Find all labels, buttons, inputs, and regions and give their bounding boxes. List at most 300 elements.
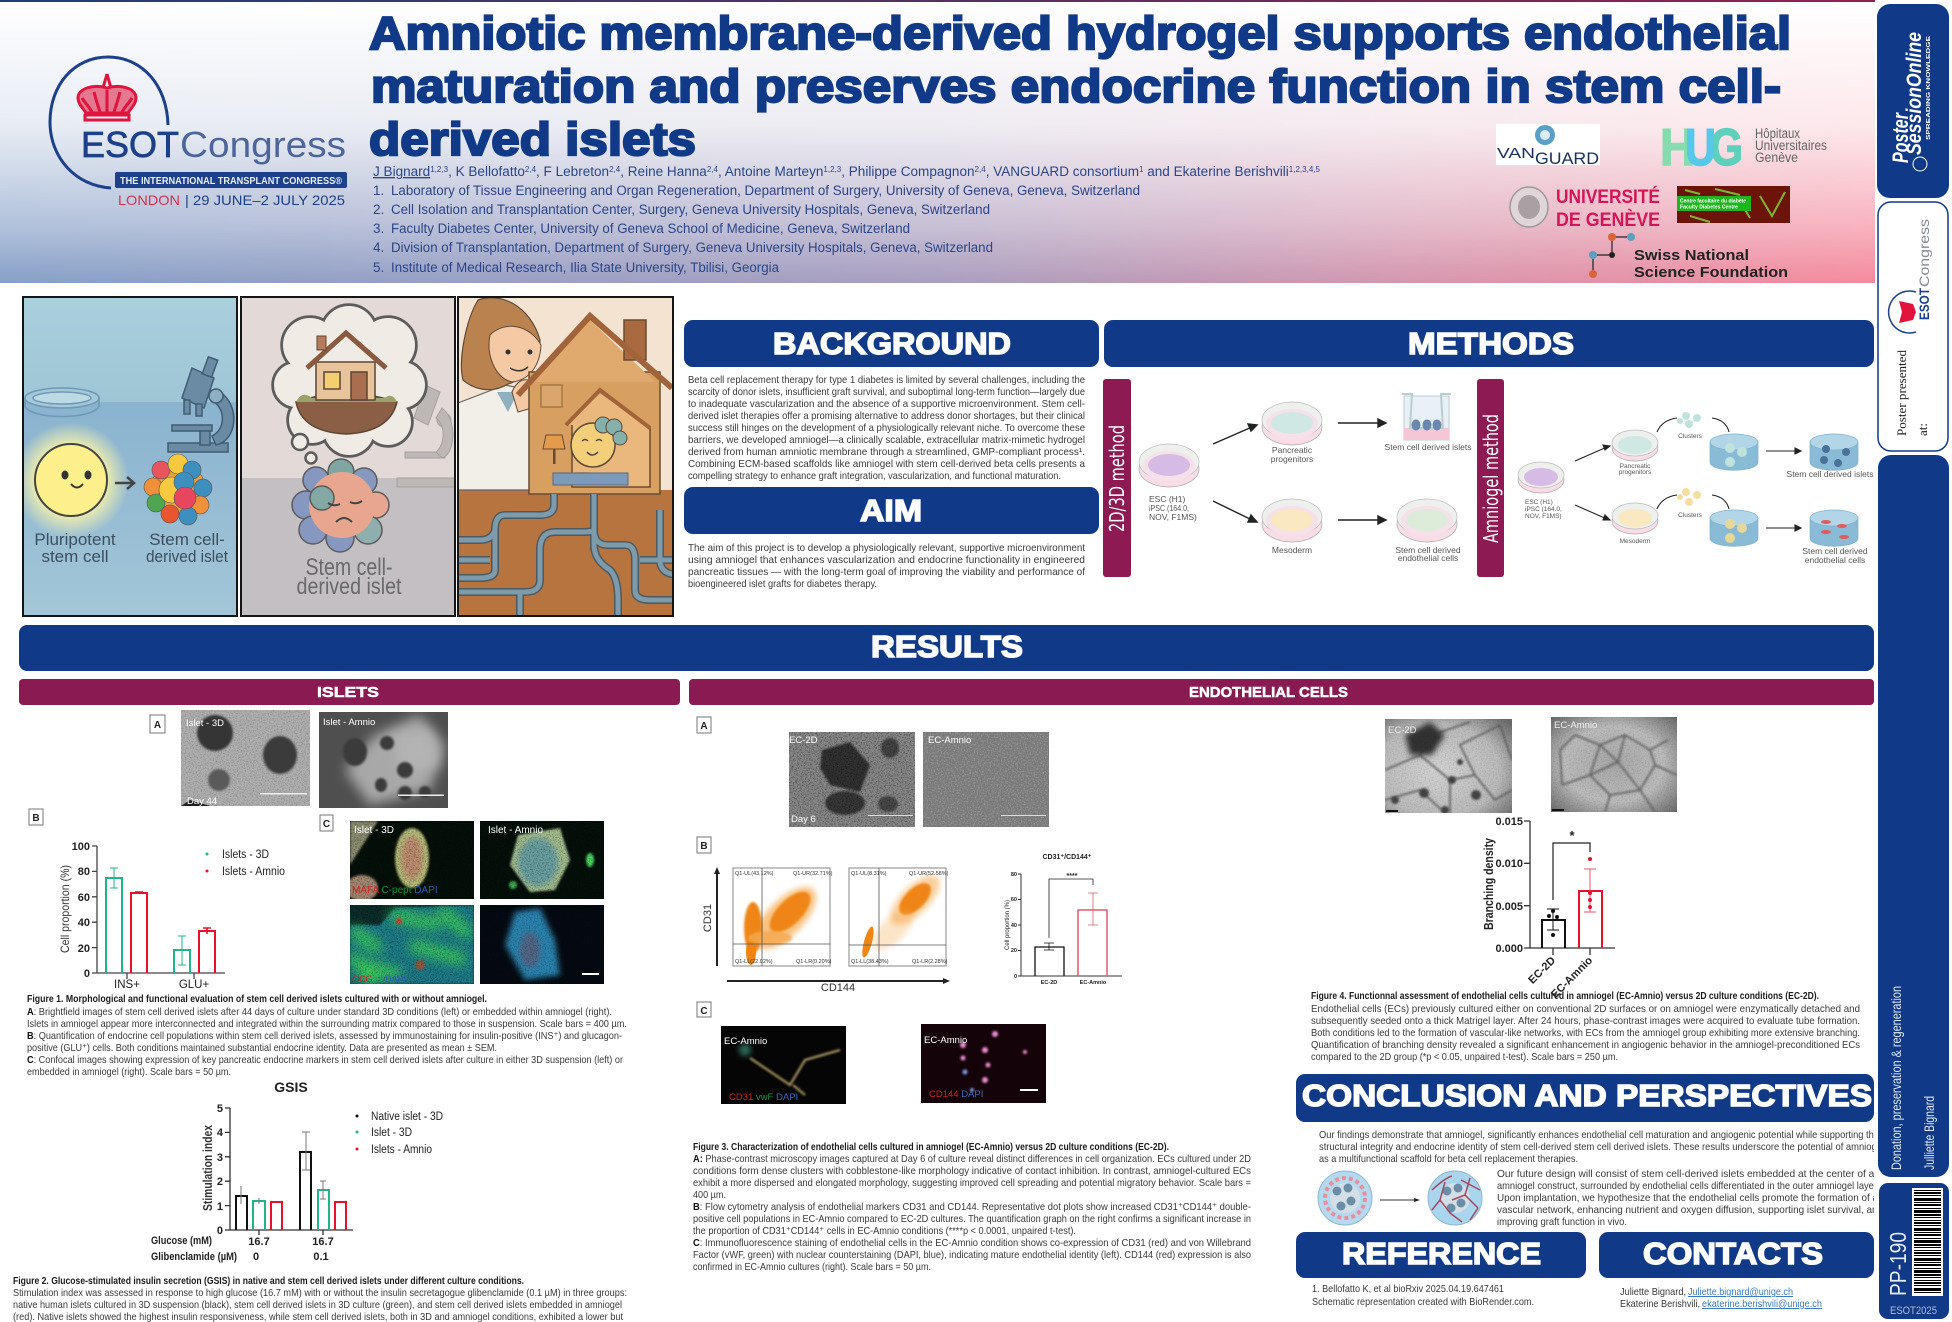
affiliations: 1. <box>373 183 384 198</box>
label: stem cell derived islets: Stem cell derived islets <box>1787 469 1873 479</box>
title: derived islets <box>369 113 696 165</box>
caption: figure 4: subsequently seeded onto a thick Matrigel layer. After 24 hours, phase-contrast images were acquired to evaluate tube formation. <box>1311 1016 1860 1027</box>
image: EC-2D phase contrast: EC-2D <box>789 735 818 746</box>
legend: Islets - Amnio <box>222 866 285 878</box>
affiliations: Division of Transplantation, Department of Surgery, Geneva University Hospitals, Geneva, Switzerland <box>391 240 993 255</box>
caption: figure 3: 400 µm. <box>693 1190 726 1201</box>
image: confocal islet 3D bottom: GCG ... DAPI <box>352 974 406 984</box>
caption: figure 3: confirmed in EC-Amnio cultures (right). Scale bars = 50 µm. <box>693 1262 931 1273</box>
labels: clusters: Clusters <box>1678 512 1703 519</box>
title: Amniotic membrane-derived hydrogel supports endothelial <box>369 7 1791 59</box>
label: pancreatic progenitors: Pancreatic <box>1620 463 1651 470</box>
logo: HUG: G <box>1710 119 1743 177</box>
text block: aim: The aim of this project is to develop a physiologically relevant, supportive microenvironment <box>688 543 1085 554</box>
text block: perspectives: Upon implantation, we hypothesize that the endothelial cells promote the formation of a <box>1497 1193 1878 1204</box>
affiliations: 3. <box>373 221 384 236</box>
chart: branching density: EC-Amnio <box>1549 954 1595 1001</box>
label: ESC / iPSC: iPSC (164.0, <box>1525 506 1562 513</box>
text block: background: Combining ECM-based scaffolds like amniogel with stem cell-derived beta cells presents a <box>688 459 1085 470</box>
caption: figure 2: Stimulation index was assessed in response to high glucose (16.7 mM) with or without the insulin secretagogue glibenclamide (0.1 µM) in three groups: <box>13 1288 627 1299</box>
title <box>369 7 1791 165</box>
panel: presented at: Congress <box>1916 219 1932 287</box>
text block: background: scarcity of donor islets, insufficient graft survival, and suboptimal long-term function—largely due <box>688 387 1085 398</box>
caption: figure 1: positive (GLU⁺) cells. Both conditions maintained substantial endocrine identity. Data are presented as mean ± SEM. <box>27 1043 497 1054</box>
logo: ESOT Congress: Congress <box>180 124 346 165</box>
chart: GSIS: GSIS <box>274 1079 308 1095</box>
heading: results <box>19 625 1874 671</box>
panel: topic and author: Julliette Bignard <box>1921 1096 1937 1170</box>
affiliations: 2. <box>373 202 384 217</box>
caption: figure 1: A: Brightfield images of stem cell derived islets after 44 days of culture under standard 3D conditions (left) or embedded within amniogel (right). <box>27 1007 612 1018</box>
icon: microscope <box>168 357 234 452</box>
legend: Native islet - 3D <box>371 1111 443 1123</box>
chart: branching density: 0.005 <box>1495 901 1523 913</box>
chart: CD31+/CD144+ proportion: 40 <box>1011 923 1017 929</box>
icon: arrow <box>115 477 134 489</box>
icon: house with happy cell <box>518 316 672 494</box>
authors: , F Lebreton <box>536 164 609 179</box>
axis table: 16.7 <box>312 1236 334 1248</box>
label: stem cell derived islets: Stem cell derived islets <box>1385 442 1471 452</box>
labels: clusters: Clusters <box>1678 433 1703 440</box>
caption: figure 1: C: Confocal images showing expression of key pancreatic endocrine markers in stem cell derived islets after culture in either 3D suspension (left) or <box>27 1055 624 1066</box>
chart: cell proportion: 80 <box>78 866 90 878</box>
caption: figure 4: Both conditions led to the formation of vascular-like networks, with ECs from the amniogel group exhibiting more extensive branching. <box>1311 1028 1860 1039</box>
chart: CD31+/CD144+ proportion: EC-2D <box>1041 980 1057 986</box>
authors: , K Bellofatto <box>448 164 525 179</box>
icon: crown <box>78 74 136 120</box>
labels: clusters <box>1678 433 1703 519</box>
icon: starting dish <box>1139 444 1199 487</box>
icon: endothelial dish <box>1397 499 1457 542</box>
text block: contacts: Juliette.bignard@unige.ch <box>1688 1287 1793 1298</box>
authors: J Bignard <box>373 164 430 179</box>
image: islet 3D brightfield: Islet - 3D <box>186 718 224 729</box>
logo: VANGUARD: GUARD <box>1535 149 1599 168</box>
label: ESC / iPSC: NOV, F1MS) <box>1149 512 1197 522</box>
logo: Universite de Geneve: DE GENÈVE <box>1556 208 1660 231</box>
label: stem cell derived endothelial cells <box>1395 545 1461 563</box>
panel label: figure 1 C: C <box>323 819 330 830</box>
label: ESC / iPSC: iPSC (164.0, <box>1149 503 1189 513</box>
image: confocal islet 3D top <box>346 821 474 901</box>
image: confocal islet 3D bottom <box>350 905 474 985</box>
caption: figure 3: Factor (vWF, green) with nuclear counterstaining (DAPI, blue), indicating mature endothelial identity (left). CD144 (red) expression is also <box>693 1250 1251 1261</box>
icon: transwell with islets <box>1402 394 1451 440</box>
icon: pancreatic progenitors dish <box>1262 402 1322 445</box>
image: EC-Amnio CD144: CD144 DAPI <box>929 1089 983 1100</box>
logo: Faculty Diabetes Centre <box>1677 186 1790 223</box>
label: pluripotent stem cell <box>36 533 116 562</box>
text block: perspectives: improving graft function in vivo. <box>1497 1217 1627 1228</box>
heading: islets: ISLETS <box>317 684 379 701</box>
caption: figure 4 <box>1311 990 1860 1063</box>
logo: ESOT Congress: | 29 JUNE–2 JULY 2025 <box>185 192 345 208</box>
icon: clusters pancreatic <box>1677 412 1701 428</box>
axis table: Glucose (mM) <box>151 1235 212 1247</box>
panel: presented at: at: <box>1915 423 1930 436</box>
label bar: amniogel method: Amniogel method <box>1479 414 1503 543</box>
chart: GSIS: Stimulation index <box>201 1125 215 1211</box>
panel: topic and author: Donation, preservation & regeneration <box>1888 986 1904 1170</box>
chart: GSIS: 4 <box>217 1127 224 1139</box>
caption: figure 1: Figure 1. Morphological and functional evaluation of stem cell derived islets cultured with or without amniogel. <box>27 993 487 1005</box>
panel: PosterSessionOnline: Poster <box>1888 112 1913 163</box>
chart: cell proportion: 60 <box>78 892 90 904</box>
chart: branching density: * <box>1569 828 1575 843</box>
text block: aim: pancreatic tissues — with the long-term goal of improving the viability and performance of <box>688 567 1085 578</box>
flow plot: EC-2D: Q1-LR(0.20%) <box>796 959 832 965</box>
icon: scientist <box>458 298 541 490</box>
caption: figure 3: A: Phase-contrast microscopy images captured at Day 6 of culture reveal distinct differences in cell organization. ECs cultured under 2D <box>693 1154 1251 1165</box>
chart: GSIS: 5 <box>217 1103 223 1115</box>
image: EC-2D tube formation: EC-2D <box>1388 725 1417 736</box>
label: mesoderm: Mesoderm <box>1620 538 1650 545</box>
image: confocal islet amnio top: Islet - Amnio <box>488 825 543 836</box>
chart: GSIS: 0 <box>217 1225 223 1237</box>
caption: figure 4: Endothelial cells (ECs) previously cultured either on conventional 2D surfaces or on amniogel were enzymatically detached and <box>1311 1004 1860 1015</box>
label: ESC / iPSC: ESC (H1) <box>1525 499 1553 506</box>
text block: reference <box>1312 1284 1534 1308</box>
chart: cell proportion: 100 <box>72 841 90 853</box>
image: confocal islet 3D top: MAFA C-pept DAPI <box>352 885 438 896</box>
label: pluripotent stem cell: stem cell <box>41 547 109 566</box>
legend: Islets - 3D <box>222 849 269 861</box>
label: pancreatic progenitors: progenitors <box>1619 469 1652 476</box>
heading: reference: REFERENCE <box>1342 1236 1541 1271</box>
image: confocal islet 3D top: Islet - 3D <box>354 825 394 836</box>
caption: figure 3: B: Flow cytometry analysis of endothelial markers CD31 and CD144. Representative dot plots show increased CD31⁺CD144⁺ double- <box>693 1202 1251 1213</box>
logo: HUG: U <box>1685 119 1716 177</box>
chart: CD31+/CD144+ proportion: 0 <box>1014 974 1017 980</box>
image: islet 3D brightfield <box>181 710 310 807</box>
chart: cell proportion <box>58 841 285 991</box>
text block: background: compelling strategy to enhance graft integration, vascularization, and functional maturation. <box>688 471 1061 482</box>
arrows <box>1213 419 1386 524</box>
heading: endothelial cells: ENDOTHELIAL CELLS <box>1189 684 1348 701</box>
logo: Swiss National Science Foundation: Science Foundation <box>1634 264 1788 281</box>
chart: CD31+/CD144+ proportion: EC-Amnio <box>1080 980 1107 986</box>
flow plot: EC-Amnio: Q1-UL(8.31%) <box>851 871 887 877</box>
text block: aim: bioengineered islet grafts for diabetes therapy. <box>688 579 877 590</box>
axes <box>702 867 950 994</box>
logo: Universite de Geneve <box>1510 185 1660 231</box>
caption: figure 3: exhibit a more dispersed and elongated morphology, suggesting improved cell spreading and potential migratory behavior. Scale bars = <box>693 1178 1251 1189</box>
flow plot: EC-Amnio: Q1-LR(2.28%) <box>912 959 948 965</box>
heading: contacts <box>1599 1232 1874 1278</box>
text block: conclusion: structural integrity and endocrine identity of stem cell-derived stem cell derived islets. These results underscore the potential of amniogel <box>1319 1142 1884 1153</box>
image: EC-Amnio CD144 <box>921 1024 1046 1103</box>
chart: cell proportion: 20 <box>78 943 90 955</box>
heading: results: RESULTS <box>871 629 1023 664</box>
label: stem cell derived islet <box>146 533 228 562</box>
logo: HUG: Genève <box>1755 150 1798 165</box>
arrow <box>1380 1198 1420 1202</box>
logo: Faculty Diabetes Centre: Centre facultaire du diabète <box>1680 198 1746 204</box>
affiliations: 5. <box>373 260 384 275</box>
image: EC-Amnio tube formation <box>1551 717 1677 812</box>
authors: and Ekaterine Berishvili <box>1143 164 1289 179</box>
chart: CD31+/CD144+ proportion: 60 <box>1011 897 1017 903</box>
caption: figure 3: Figure 3. Characterization of endothelial cells cultured in amniogel (EC-Amnio) versus 2D culture conditions (EC-2D). <box>693 1141 1169 1153</box>
logo: HUG: Universitaires <box>1755 138 1827 153</box>
caption: figure 3 <box>693 1141 1251 1273</box>
chart: flow cytometry plots <box>702 867 950 994</box>
authors: , Reine Hanna <box>620 164 707 179</box>
chart: branching density: 0.015 <box>1495 816 1523 828</box>
panel label: figure 3 A: A <box>700 721 708 732</box>
chart: cell proportion: GLU+ <box>179 979 209 991</box>
axis table: 0 <box>253 1251 259 1263</box>
axis table: 0.1 <box>313 1251 329 1263</box>
bars <box>1542 920 1565 948</box>
image: confocal islet amnio bottom <box>480 905 604 984</box>
heading: contacts: CONTACTS <box>1643 1236 1823 1271</box>
panel: illustration pluripotent stem cell <box>13 297 237 616</box>
chart: CD31+/CD144+ proportion: 80 <box>1011 872 1017 878</box>
chart: CD31+/CD144+ proportion: 20 <box>1011 948 1017 954</box>
logo: Faculty Diabetes Centre: Faculty Diabetes Centre <box>1680 204 1738 210</box>
panel label: figure 3 C: C <box>700 1006 708 1017</box>
chart: cell proportion: 40 <box>78 917 90 929</box>
authors: 1 <box>1139 165 1144 174</box>
icon: colorful islet <box>144 454 212 525</box>
logo: Universite de Geneve: UNIVERSITÉ <box>1556 185 1660 208</box>
heading: background: BACKGROUND <box>773 326 1011 361</box>
arrows <box>1575 418 1801 531</box>
panel: 2D/3D method diagram <box>1103 379 1471 577</box>
logo: ESOT Congress: THE INTERNATIONAL TRANSPLANT CONGRESS® <box>120 175 342 187</box>
label: stem cell derived endothelial cells: Stem cell derived <box>1395 545 1461 555</box>
caption: figure 4: Figure 4. Functionnal assessment of endothelial cells cultured in amniogel (EC-Amnio) versus 2D culture conditions (EC-2D). <box>1311 990 1819 1002</box>
logo: VANGUARD <box>1496 124 1600 168</box>
authors: 2,4 <box>525 165 537 174</box>
label: stem cell derived islet <box>297 558 402 594</box>
panel: illustration scientist and vascularized house <box>458 297 680 616</box>
axis table <box>151 1235 334 1263</box>
panel: PosterSessionOnline: SPREADING KNOWLEDGE <box>1926 35 1932 140</box>
text block: aim: using amniogel that enhances vascularization and endocrine functionality in engineered <box>688 555 1085 566</box>
chart: cell proportion: 0 <box>84 968 90 980</box>
panel: presented at <box>1878 202 1948 451</box>
header banner <box>0 0 1875 283</box>
label: ESC / iPSC: NOV, F1MS) <box>1525 513 1562 520</box>
caption: figure 2: Figure 2. Glucose-stimulated insulin secretion (GSIS) in native and stem cell derived islets under different culture conditions. <box>13 1275 524 1287</box>
title: maturation and preserves endocrine function in stem cell- <box>371 60 1781 112</box>
panel label: figure 1 A: A <box>154 720 161 731</box>
authors: 1,2,3 <box>823 165 842 174</box>
label bar: amniogel method <box>1477 379 1504 577</box>
bars <box>106 868 215 973</box>
caption: figure 1: Islets in amniogel appear more interconnected and integrated within the surrounding matrix compared to those in suspension. Scale bars = 400 µm. <box>27 1019 627 1030</box>
text block: conclusion <box>1319 1130 1884 1165</box>
bars <box>236 1132 346 1230</box>
authors: , VANGUARD consortium <box>986 164 1139 179</box>
flow plot: EC-Amnio: Q1-UR(52.58%) <box>909 871 949 877</box>
label: stem cell derived islet: Stem cell- <box>149 530 225 549</box>
logo: VANGUARD: VAN <box>1497 145 1535 162</box>
text block: background: to inadequate vascularization and the absence of a supportive microenvironment. Stem cell- <box>688 399 1085 410</box>
icon: vascular pipes <box>458 494 680 616</box>
caption: figure 4: compared to the 2D group (*p < 0.05, unpaired t-test). Scale bars = 250 µm. <box>1311 1052 1618 1063</box>
chart: CD31+/CD144+ proportion: Cell proportion (%) <box>1005 900 1011 950</box>
label: stem cell derived islet: derived islet <box>296 573 402 599</box>
affiliations: 4. <box>373 240 384 255</box>
legend: Islets - Amnio <box>371 1144 432 1156</box>
heading: methods <box>1104 320 1874 367</box>
panel label: figure 3 B <box>697 837 711 853</box>
image: EC-Amnio phase contrast <box>923 732 1049 827</box>
flow plot: EC-2D: Q1-UR(32.71%) <box>793 871 833 877</box>
panel label: figure 1 A <box>150 715 165 733</box>
image: confocal islet amnio top <box>480 821 604 899</box>
flow plot: EC-2D <box>733 868 833 966</box>
panel label: figure 3 B: B <box>700 841 708 852</box>
image: EC-Amnio tube formation: EC-Amnio <box>1554 720 1597 731</box>
label: stem cell derived islet: derived islet <box>146 547 228 566</box>
label: pancreatic progenitors: progenitors <box>1271 454 1313 464</box>
icon: mesoderm dish <box>1612 503 1658 534</box>
logo: ESOT Congress: ESOT <box>81 124 179 165</box>
heading: aim: AIM <box>860 493 922 528</box>
text block: perspectives: amniogel construct, surrounded by endothelial cells differentiated in the outer amniogel layer. <box>1497 1181 1879 1192</box>
text block: perspectives: Our future design will consist of stem cell-derived islets embedded at the center of an <box>1497 1169 1880 1180</box>
label: stem cell derived islet: Stem cell- <box>306 554 392 581</box>
text block: contacts: ekaterine.berishvili@unige.ch <box>1702 1299 1822 1310</box>
heading: islets <box>19 679 680 705</box>
image: EC-2D phase contrast: Day 6 <box>791 814 816 825</box>
axis table: Glibenclamide (µM) <box>151 1251 237 1263</box>
text block: background <box>688 375 1085 482</box>
chart: cell proportion: INS+ <box>114 979 140 991</box>
affiliations: Institute of Medical Research, Ilia State University, Tbilisi, Georgia <box>391 260 779 275</box>
panel: illustration islet dreaming of a niche <box>241 297 457 616</box>
heading: background <box>684 320 1099 367</box>
caption: figure 2: native human islets cultured in 3D suspension (black), stem cell derived islets in 3D culture (green), and stem cell derived islets embedded in amniogel <box>13 1300 622 1311</box>
logo: HUG: Hôpitaux <box>1755 126 1800 141</box>
label: pancreatic progenitors: Pancreatic <box>1272 445 1313 455</box>
chart: GSIS: 1 <box>217 1201 223 1213</box>
icon: clusters mesoderm <box>1677 488 1701 506</box>
chart: CD31+/CD144+ proportion: **** <box>1067 873 1078 880</box>
panel: presented at: ESOT <box>1916 288 1932 320</box>
text block: background: derived islet therapies offer a promising alternative to address donor shortages, but their clinical <box>688 411 1085 422</box>
flow plot: EC-Amnio: Q1-LL(38.43%) <box>851 959 889 965</box>
text block: perspectives: vascular network, enhancing nutrient and oxygen diffusion, supporting islet survival, and <box>1497 1205 1883 1216</box>
text block: conclusion: as a multifunctional scaffold for beta cell replacement therapies. <box>1319 1154 1578 1165</box>
chart: cell proportion: Cell proportion (%) <box>58 865 72 953</box>
icon: starting dish <box>1518 462 1564 493</box>
panel label: figure 3 A <box>697 717 711 733</box>
icon: faded microscope <box>397 385 457 487</box>
text block: background: Beta cell replacement therapy for type 1 diabetes is limited by several challenges, including the <box>688 375 1085 386</box>
flow plot: EC-2D: Q1-LL(22.02%) <box>735 959 773 965</box>
text block: background: barriers, we developed amniogel—a clinically scalable, extracellular matrix-mimetic hydrogel <box>688 435 1085 446</box>
label: pancreatic progenitors <box>1271 445 1313 464</box>
image: EC-Amnio CD31 vWF: CD31 vwF DAPI <box>729 1092 798 1103</box>
image: EC-Amnio CD144: EC-Amnio <box>924 1035 967 1046</box>
image: EC-Amnio CD31 vWF <box>721 1026 846 1104</box>
icon: pancreatic progenitors dish <box>1612 430 1658 461</box>
image: islet amnio brightfield <box>319 712 448 808</box>
authors: 1,2,3 <box>430 165 449 174</box>
icon: happy stem cell <box>24 424 127 536</box>
affiliations: Faculty Diabetes Center, University of Geneva School of Medicine, Geneva, Switzerland <box>391 221 910 236</box>
icon: sad islet <box>292 459 389 552</box>
caption: figure 3: conditions form dense clusters with cobblestone-like morphology indicative of contact inhibition. In contrast, amniogel-cultured ECs <box>693 1166 1251 1177</box>
authors: , Antoine Marteyn <box>718 164 823 179</box>
panel: presented at: Poster presented <box>1894 349 1909 436</box>
caption: figure 1 <box>27 993 627 1078</box>
image: EC-2D phase contrast <box>789 732 915 827</box>
label: stem cell derived endothelial cells: endothelial cells <box>1398 553 1458 563</box>
caption: figure 1: embedded in amniogel (right). Scale bars = 50 µm. <box>27 1067 231 1078</box>
text block: contacts: Ekaterine Berishvili, <box>1620 1299 1700 1310</box>
caption: figure 3: positive cell populations in EC-Amnio compared to EC-2D cultures. The quantification graph on the right confirms a significant increase in <box>693 1214 1251 1225</box>
text block: perspectives <box>1497 1169 1883 1228</box>
text block: background: derived from human amniotic membrane through a streamlined, GMP-compliant process¹. <box>688 447 1085 458</box>
logo: Swiss National Science Foundation: Swiss National <box>1634 247 1749 264</box>
chart: branching density: EC-2D <box>1526 955 1558 986</box>
chart: GSIS: 3 <box>217 1152 223 1164</box>
chart: branching density: 0.000 <box>1495 943 1523 955</box>
panel: topic and author <box>1878 455 1949 1177</box>
text block: aim <box>688 543 1085 590</box>
panel: poster id and barcode: PP-190 <box>1885 1232 1911 1296</box>
panel: amniogel method diagram <box>1477 379 1873 577</box>
heading: methods: METHODS <box>1408 326 1574 361</box>
panel: PosterSessionOnline <box>1877 4 1949 198</box>
label: ESC / iPSC <box>1525 499 1562 520</box>
label: stem cell derived endothelial cells: Stem cell derived <box>1802 546 1868 556</box>
legend: Islet - 3D <box>371 1127 412 1139</box>
caption: figure 3: the proportion of CD31⁺CD144⁺ cells in EC-Amnio conditions (****p < 0.0001, unpaired t-test). <box>693 1226 1076 1237</box>
chart: GSIS: 2 <box>217 1176 223 1188</box>
logo: Swiss National Science Foundation <box>1589 233 1788 281</box>
affiliations: Laboratory of Tissue Engineering and Organ Regeneration, Department of Surgery, University of Geneva, Geneva, Switzerland <box>391 183 1140 198</box>
logo: ESOT Congress <box>50 57 347 208</box>
panel: poster id and barcode <box>1879 1183 1949 1319</box>
chart: CD31+/CD144+ proportion <box>1005 854 1122 986</box>
icon: thought cloud with house <box>273 305 426 464</box>
heading: endothelial cells <box>689 679 1874 705</box>
authors: 2,4 <box>609 165 621 174</box>
caption: figure 2 <box>13 1275 627 1322</box>
authors: 1,2,3,4,5 <box>1289 165 1321 174</box>
chart: branching density <box>1481 816 1615 1001</box>
text block: reference: 1. Bellofatto K, et al bioRxiv 2025.04.19.647461 <box>1312 1284 1504 1295</box>
chart: CD31+/CD144+ proportion: CD31⁺/CD144⁺ <box>1042 854 1092 861</box>
affiliations <box>373 183 1140 275</box>
caption: figure 3: C: Immunofluorescence staining of endothelial cells in the EC-Amnio condition shows co-expression of CD31 (red) and von Willebrand <box>693 1238 1251 1249</box>
label: pluripotent stem cell: Pluripotent <box>34 530 116 549</box>
axis table: 16.7 <box>248 1236 270 1248</box>
icon: mesoderm dish <box>1262 499 1322 542</box>
label: stem cell derived endothelial cells <box>1802 546 1868 565</box>
authors: 2,4 <box>975 165 986 174</box>
chart: GSIS <box>151 1079 443 1263</box>
icon: petri dish <box>25 388 99 416</box>
flow plot: EC-2D: Q1-UL(43.12%) <box>735 871 774 877</box>
icon: construct before implantation <box>1318 1171 1372 1225</box>
label: mesoderm: Mesoderm <box>1272 545 1312 555</box>
image: EC-Amnio phase contrast: EC-Amnio <box>928 735 971 746</box>
affiliations: Cell Isolation and Transplantation Center, Surgery, Geneva University Hospitals, Geneva, Switzerland <box>391 202 990 217</box>
icon: amniogel cylinders <box>1710 434 1858 546</box>
image: EC-2D tube formation <box>1385 719 1512 814</box>
authors: 2,4 <box>707 165 719 174</box>
text block: background: success still hinges on the development of a physiologically relevant niche. To overcome these <box>688 423 1085 434</box>
